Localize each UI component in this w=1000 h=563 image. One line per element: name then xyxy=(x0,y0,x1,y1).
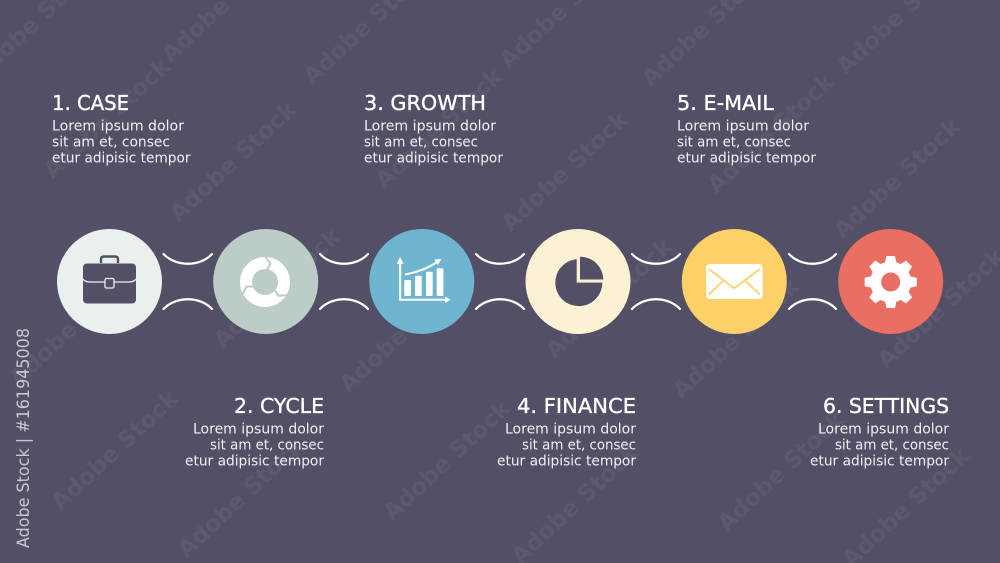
text block 5: e-mail: etur adipisic tempor xyxy=(677,150,816,166)
text block 1: case: Lorem ipsum dolor xyxy=(52,118,184,134)
watermark pattern: Adobe Stock xyxy=(379,395,516,526)
icon: briefcase xyxy=(83,256,136,304)
text block 6: settings: etur adipisic tempor xyxy=(810,454,949,470)
watermark pattern: Adobe Stock xyxy=(47,385,184,516)
watermark pattern: Adobe Stock xyxy=(668,273,805,404)
watermark pattern: Adobe Stock xyxy=(829,113,966,244)
icon: cycle arrows xyxy=(240,256,287,301)
text block 2: cycle: sit am et, consec xyxy=(210,438,324,454)
text block 5: e-mail: Lorem ipsum dolor xyxy=(677,118,809,134)
text block 2: cycle: etur adipisic tempor xyxy=(185,454,324,470)
text block 3: growth: sit am et, consec xyxy=(364,134,478,150)
text block 3: growth: Lorem ipsum dolor xyxy=(364,118,496,134)
text block 6: settings: 6. SETTINGS xyxy=(823,394,949,418)
text block 4: finance: Lorem ipsum dolor xyxy=(505,422,636,438)
text block 2: cycle: Lorem ipsum dolor xyxy=(193,422,324,438)
text block 1: case: 1. CASE xyxy=(52,91,129,115)
text block 2: cycle: 2. CYCLE xyxy=(234,394,324,418)
icon: pie chart xyxy=(555,257,603,306)
text block 1: case xyxy=(52,91,191,166)
icon: gear xyxy=(865,256,917,308)
step 2: cycle circle xyxy=(213,229,318,334)
watermark pattern: Adobe Stock xyxy=(335,267,472,398)
text block 5: e-mail: 5. E-MAIL xyxy=(677,91,775,115)
text block 1: case: sit am et, consec xyxy=(52,134,170,150)
text block 5: e-mail xyxy=(677,91,816,166)
text block 3: growth: etur adipisic tempor xyxy=(364,150,503,166)
watermark pattern: Adobe Stock xyxy=(371,63,508,194)
text block 6: settings: Lorem ipsum dolor xyxy=(818,422,949,438)
step 1: briefcase circle xyxy=(57,229,162,334)
watermark pattern: Adobe Stock xyxy=(173,432,310,563)
text block 5: e-mail: sit am et, consec xyxy=(677,134,791,150)
icon: envelope xyxy=(706,264,763,299)
text block 4: finance: etur adipisic tempor xyxy=(497,454,636,470)
text block 4: finance: 4. FINANCE xyxy=(517,394,636,418)
watermark pattern: Adobe Stock xyxy=(165,96,302,227)
step 6: settings circle xyxy=(838,229,943,334)
step 3: growth circle xyxy=(369,229,474,334)
watermark pattern: Adobe Stock xyxy=(39,53,176,184)
text block 1: case: etur adipisic tempor xyxy=(52,150,191,166)
text block 2: cycle xyxy=(185,394,324,470)
text block 4: finance xyxy=(497,394,636,470)
step 5: e-mail circle xyxy=(682,229,787,334)
watermark pattern: Adobe Stock xyxy=(5,261,142,392)
text block 3: growth: 3. GROWTH xyxy=(364,91,486,115)
watermark pattern: Adobe Stock xyxy=(703,68,840,199)
stock id side label: Adobe Stock | #161945008 xyxy=(14,328,33,548)
text block 3: growth xyxy=(364,91,503,166)
text block 6: settings xyxy=(810,394,949,470)
watermark pattern: Adobe Stock xyxy=(209,223,346,354)
connectors between circles xyxy=(164,254,836,309)
watermark pattern: Adobe Stock xyxy=(541,233,678,364)
watermark pattern: Adobe Stock xyxy=(713,406,850,537)
watermark pattern: Adobe Stock xyxy=(497,106,634,237)
text block 6: settings: sit am et, consec xyxy=(835,438,949,454)
text block 4: finance: sit am et, consec xyxy=(522,438,636,454)
step 4: finance circle xyxy=(526,229,630,334)
icon: growth chart xyxy=(397,257,451,303)
